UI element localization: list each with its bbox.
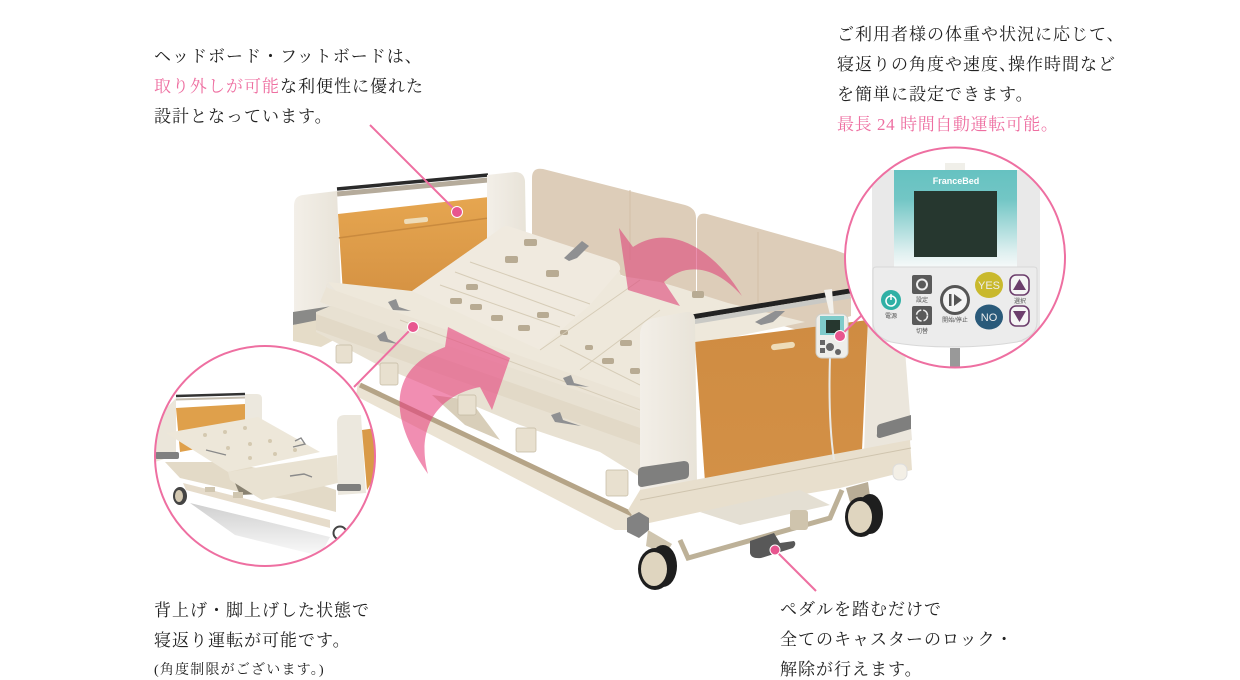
frame buckles	[336, 345, 628, 496]
cable	[950, 348, 960, 366]
text: pedal lock: 解除が行えます。	[780, 660, 923, 679]
text: rolling in raised position: 寝返り運転が可能です。	[154, 630, 351, 650]
text: removable boards: 取り外しが可能	[154, 77, 280, 96]
power button	[881, 290, 901, 320]
text: controller settings: 寝返りの角度や速度、	[837, 54, 1017, 74]
text: pedal lock: ペダルを踏むだけで	[780, 600, 942, 619]
callout line: controller	[834, 315, 862, 342]
select up button	[1010, 275, 1029, 305]
main bed illustration	[293, 169, 912, 590]
foot end panel	[638, 290, 912, 491]
text: controller settings: 操作時間など	[1008, 55, 1116, 74]
switch button: 切替	[916, 327, 928, 335]
head end panel	[293, 172, 526, 347]
controller body	[872, 170, 1040, 342]
hanging remote control	[816, 289, 848, 460]
text: controller settings: 最長 24 時間自動運転可能。	[837, 115, 1058, 134]
deck seams	[400, 262, 660, 410]
select down button	[1010, 306, 1029, 326]
no button: NO	[981, 312, 998, 324]
callout line: head board	[370, 125, 462, 218]
settings button: 設定	[916, 296, 928, 304]
caster wheels and pedal bar	[638, 482, 883, 590]
start stop button	[942, 286, 968, 324]
deck slot holes	[450, 239, 704, 374]
yes button: YES	[978, 280, 1000, 292]
brand label: FranceBed	[933, 176, 979, 186]
side boards behind the bed	[532, 169, 851, 331]
select up button: 選択	[1014, 297, 1026, 305]
button panel	[873, 267, 1037, 347]
lower side frame and long rail	[356, 382, 632, 530]
grey clips	[377, 241, 785, 426]
text: removable boards: な利便性に優れた	[280, 77, 424, 96]
text: removable boards: 設計となっています。	[154, 107, 333, 126]
bed deck	[316, 226, 805, 496]
text: controller settings: を簡単に設定できます。	[837, 85, 1034, 104]
text: pedal lock: 全てのキャスターのロック・	[780, 630, 1014, 649]
no button	[975, 304, 1003, 330]
screen	[914, 191, 997, 257]
start stop button: 開始/停止	[942, 316, 968, 324]
power button: 電源	[885, 312, 897, 320]
yes button	[975, 272, 1003, 298]
callout line: pedal	[770, 545, 816, 591]
callout line: raised deck	[354, 322, 418, 387]
switch button	[912, 306, 932, 335]
rotation arrow: front	[400, 327, 510, 474]
text: controller settings: ご利用者様の体重や状況に応じて、	[837, 25, 1125, 44]
text: rolling in raised position: (角度制限がございます。)	[154, 661, 325, 678]
inset circle: bed with raised back	[155, 346, 376, 566]
base frame	[627, 440, 912, 538]
settings button	[912, 275, 932, 304]
rotation arrow: back	[619, 228, 742, 306]
text: rolling in raised position: 背上げ・脚上げした状態で	[154, 601, 370, 620]
inset circle: controller	[845, 148, 1065, 370]
text: removable boards: ヘッドボード・フットボードは、	[154, 47, 423, 66]
